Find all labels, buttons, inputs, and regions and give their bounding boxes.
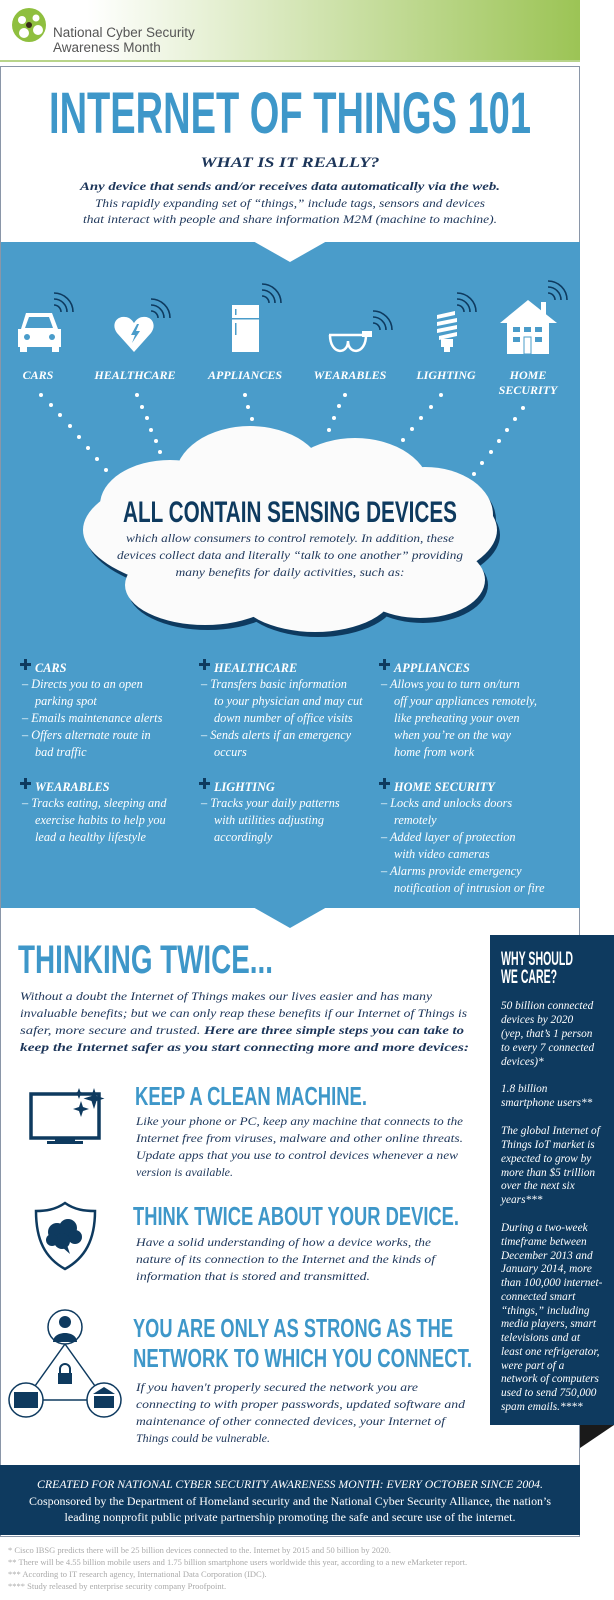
icon: heart	[114, 317, 154, 352]
panel: why should we care: 50 billion connected	[501, 1000, 594, 1012]
panel: blue devices section	[1, 241, 580, 908]
cloud text: many benefits for daily activities, such as:	[176, 565, 405, 579]
list: appliances: off your appliances remotely,	[394, 694, 537, 708]
panel: why should we care: than 100,000 internet-	[501, 1277, 603, 1289]
panel: why should we care: devices)*	[501, 1056, 544, 1068]
list: home security: HOME SECURITY	[393, 780, 496, 794]
list: cars: – Emails maintenance alerts	[21, 711, 163, 725]
panel: why should we care	[490, 935, 614, 1448]
list: appliances: – Allows you to turn on/turn	[380, 677, 520, 691]
list: home security: – Added layer of protection	[380, 830, 516, 844]
intro paragraph: keep the Internet safer as you start connecting more and more devices:	[20, 1040, 469, 1054]
list: lighting: accordingly	[214, 830, 273, 844]
list: cars: – Directs you to an open	[21, 677, 143, 691]
list: cars: parking spot	[34, 694, 97, 708]
list: wearables: WEARABLES	[35, 780, 110, 794]
subtitle: WHAT IS IT REALLY?	[200, 155, 380, 171]
list: appliances	[380, 661, 537, 759]
list: cars: – Offers alternate route in	[21, 728, 151, 742]
device labels: CARS	[23, 368, 54, 382]
panel: why should we care: (yep, that’s 1 person	[501, 1028, 593, 1040]
footer band: leading nonprofit public private partnership promoting the safe and secure use of the internet.	[64, 1510, 516, 1524]
icon: monitor	[31, 1088, 104, 1144]
panel: why should we care: connected smart	[501, 1291, 576, 1303]
panel: why should we care: spam emails.****	[501, 1401, 583, 1413]
header banner	[0, 0, 580, 62]
list: home security: notification of intrusion or fire	[394, 881, 545, 895]
panel: why should we care: network of computers	[501, 1373, 599, 1385]
panel: why should we care: January 2014, more	[501, 1263, 592, 1275]
text: network: If you haven't properly secured the network you are	[135, 1380, 419, 1394]
panel: why should we care: smartphone users**	[501, 1097, 593, 1109]
icon: wifi signals	[54, 281, 567, 330]
device labels: SECURITY	[499, 383, 559, 397]
arrow: notch	[253, 907, 327, 928]
heading: strong network: NETWORK TO WHICH YOU CONNECT.	[133, 1343, 472, 1373]
intro text	[79, 181, 500, 226]
icon: light bulb	[437, 311, 457, 352]
list: lighting: – Tracks your daily patterns	[200, 796, 340, 810]
panel: why should we care: least one refrigerator,	[501, 1346, 600, 1358]
list: healthcare: down number of office visits	[214, 711, 353, 725]
cloud text: which allow consumers to control remotely. In addition, these	[126, 531, 455, 545]
text: network: Things could be vulnerable.	[136, 1431, 270, 1445]
list: healthcare	[200, 661, 363, 759]
footnotes: **** Study released by enterprise security company Proofpoint.	[8, 1581, 226, 1591]
panel: why should we care: Things IoT market is	[501, 1139, 595, 1151]
list: home security	[380, 780, 545, 895]
device labels: WEARABLES	[314, 368, 387, 382]
panel: why should we care: The global Internet of	[501, 1125, 602, 1137]
list: wearables: lead a healthy lifestyle	[35, 830, 147, 844]
intro paragraph: safer, more secure and trusted. Here are three simple steps you can take to	[20, 1023, 464, 1037]
text: network	[135, 1380, 466, 1445]
device labels: HOME	[509, 368, 546, 382]
panel: why should we care: WE CARE?	[501, 967, 557, 988]
footnotes: * Cisco IBSG predicts there will be 25 billion devices connected to the. Internet by 2015 and 50 billion by 2020.	[8, 1545, 391, 1555]
list: appliances: like preheating your oven	[394, 711, 520, 725]
logo text	[53, 25, 195, 55]
heading: keep a clean machine: KEEP A CLEAN MACHINE.	[135, 1081, 367, 1111]
list: home security: with video cameras	[394, 847, 490, 861]
footnotes: *** According to IT research agency, International Data Corporation (IDC).	[8, 1569, 267, 1579]
list: healthcare: occurs	[214, 745, 247, 759]
list: home security: – Alarms provide emergency	[380, 864, 522, 878]
intro text: Any device that sends and/or receives data automatically via the web.	[79, 181, 500, 193]
list: wearables: – Tracks eating, sleeping and	[21, 796, 167, 810]
icon: fridge	[232, 305, 259, 352]
list: wearables: exercise habits to help you	[35, 813, 166, 827]
icon: glasses	[329, 331, 372, 351]
benefit lists	[20, 659, 545, 895]
panel: why should we care: December 2013 and	[500, 1250, 593, 1262]
panel: why should we care: 1.8 billion	[501, 1083, 548, 1095]
intro paragraph: Without a doubt the Internet of Things makes our lives easier and has many	[20, 989, 433, 1003]
list: healthcare: – Transfers basic information	[200, 677, 347, 691]
panel: why should we care: timeframe between	[501, 1236, 587, 1248]
text: clean machine	[135, 1114, 464, 1179]
list: wearables	[21, 780, 167, 844]
panel: why should we care: were part of a	[501, 1360, 565, 1372]
logo text: National Cyber Security	[53, 25, 195, 40]
cloud text	[117, 531, 463, 579]
panel: why should we care: used to send 750,000	[501, 1387, 597, 1399]
device labels	[23, 368, 559, 397]
text: clean machine: Internet free from viruses, malware and other online threats.	[135, 1131, 463, 1145]
list: lighting: LIGHTING	[213, 780, 275, 794]
list: appliances: when you’re on the way	[394, 728, 512, 742]
footer band: Cosponsored by the Department of Homeland security and the National Cyber Security Alliance, the nation’s	[29, 1494, 551, 1508]
list: lighting: with utilities adjusting	[214, 813, 324, 827]
heading: thinking twice: THINKING TWICE...	[18, 938, 273, 982]
panel: why should we care: During a two-week	[500, 1222, 589, 1234]
heading: strong network: YOU ARE ONLY AS STRONG AS THE	[133, 1313, 453, 1343]
footer band: CREATED FOR NATIONAL CYBER SECURITY AWARENESS MONTH: EVERY OCTOBER SINCE 2004.	[37, 1477, 543, 1491]
list: cars: bad traffic	[35, 745, 87, 759]
device labels: APPLIANCES	[207, 368, 282, 382]
dotted connectors	[39, 393, 525, 476]
text: clean machine: version is available.	[136, 1165, 233, 1179]
panel: why should we care: more than $5 trillion	[501, 1167, 595, 1179]
text: clean machine: Update apps that you use to control devices whenever a new	[136, 1148, 458, 1162]
device labels: LIGHTING	[415, 368, 476, 382]
text: clean machine: Like your phone or PC, keep any machine that connects to the	[135, 1114, 464, 1128]
icon: network	[9, 1310, 121, 1417]
cloud heading: ALL CONTAIN SENSING DEVICES	[123, 496, 457, 529]
cloud callout	[83, 426, 500, 637]
footnotes	[8, 1545, 467, 1591]
text: network: connecting to with proper passwords, updated software and	[136, 1397, 466, 1411]
panel: why should we care: “things,” including	[501, 1305, 590, 1317]
footer band	[0, 1465, 580, 1535]
list: cars	[21, 661, 163, 759]
icon: house	[500, 300, 557, 354]
intro text: This rapidly expanding set of “things,” include tags, sensors and devices	[95, 198, 486, 210]
intro paragraph: invaluable benefits; but we can only reap these benefits if our Internet of Things is	[20, 1006, 467, 1020]
text: think twice: nature of its connection to the Internet and the kinds of	[136, 1252, 437, 1266]
list: appliances: home from work	[394, 745, 475, 759]
icon: logo	[12, 8, 46, 42]
list: healthcare: – Sends alerts if an emergency	[200, 728, 352, 742]
icon: shield	[36, 1203, 95, 1269]
footnotes: ** There will be 4.55 billion mobile users and 1.75 billion smartphone users worldwide this year, according to a new eMarketer report.	[8, 1557, 467, 1567]
list: home security: remotely	[394, 813, 437, 827]
text: network: maintenance of other connected devices, your Internet of	[136, 1414, 447, 1428]
list: healthcare: HEALTHCARE	[213, 661, 297, 675]
text: think twice	[135, 1235, 437, 1283]
heading: think twice: THINK TWICE ABOUT YOUR DEVICE.	[133, 1201, 459, 1231]
device labels: HEALTHCARE	[93, 368, 176, 382]
panel: why should we care: devices by 2020	[501, 1014, 573, 1026]
list: home security: – Locks and unlocks doors	[380, 796, 512, 810]
panel: why should we care: to every 7 connected	[501, 1042, 595, 1054]
list: lighting	[200, 780, 340, 844]
panel: why should we care: years***	[500, 1194, 543, 1206]
panel: why should we care: media players, smart	[501, 1318, 597, 1330]
panel: why should we care: expected to grow by	[501, 1153, 592, 1165]
intro paragraph	[20, 989, 469, 1054]
list: healthcare: to your physician and may cut	[214, 694, 363, 708]
panel: why should we care: televisions and at	[501, 1332, 581, 1344]
panel: why should we care: over the next six	[501, 1180, 575, 1192]
logo text: Awareness Month	[53, 40, 161, 55]
list: cars: CARS	[35, 661, 67, 675]
heading: strong network	[133, 1313, 472, 1373]
cloud text: devices collect data and literally “talk to one another” providing	[117, 548, 463, 562]
icon: car	[18, 313, 61, 352]
text: think twice: information that is stored and transmitted.	[136, 1269, 370, 1283]
text: think twice: Have a solid understanding of how a device works, the	[135, 1235, 432, 1249]
intro text: that interact with people and share information M2M (machine to machine).	[83, 214, 497, 226]
list: appliances: APPLIANCES	[393, 661, 470, 675]
